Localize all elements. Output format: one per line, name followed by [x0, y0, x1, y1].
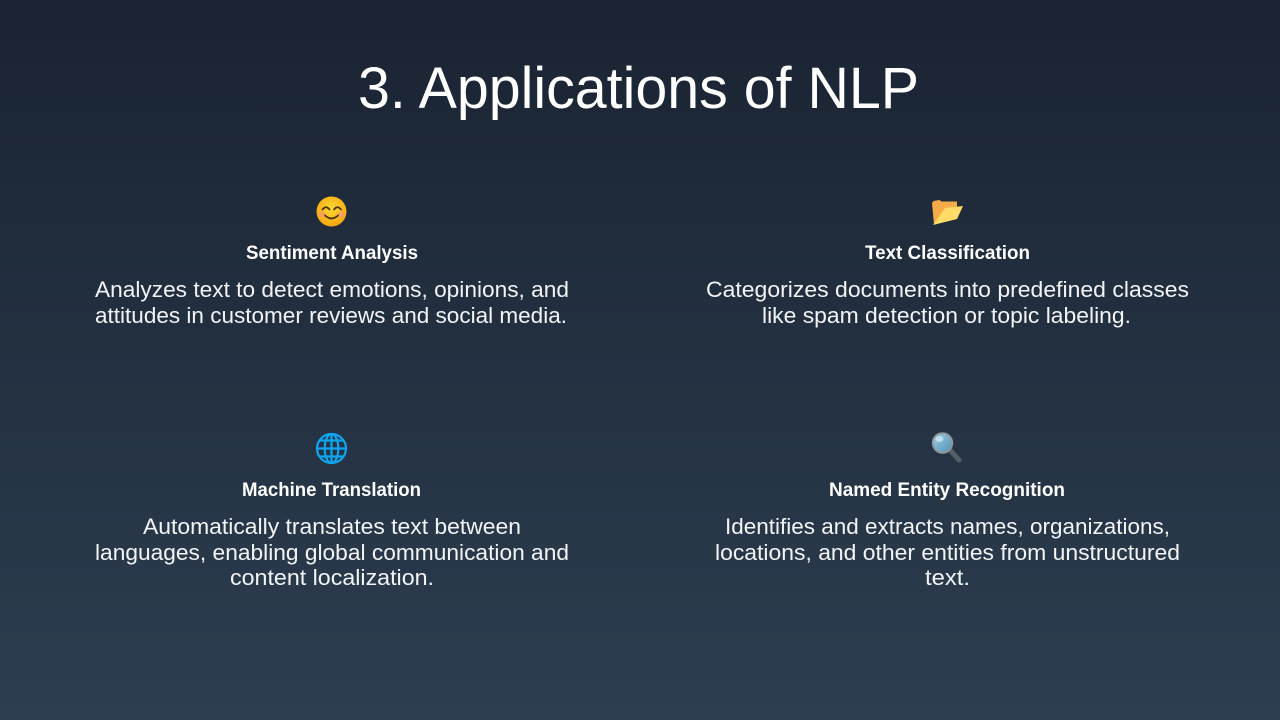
description: content localization. — [230, 565, 434, 590]
description — [95, 277, 569, 328]
description: Identifies and extracts names, organizations, — [725, 514, 1170, 539]
heading: Sentiment Analysis — [246, 242, 418, 264]
description — [706, 277, 1189, 328]
description: Automatically translates text between — [143, 514, 521, 539]
icon: open folder — [932, 200, 963, 225]
description: Categorizes documents into predefined classes — [706, 277, 1189, 302]
description — [715, 514, 1180, 590]
panel: text classification — [706, 200, 1189, 328]
icon: magnifying glass — [933, 433, 959, 460]
panel: machine translation — [95, 434, 569, 590]
heading: Machine Translation — [242, 479, 421, 501]
description: text. — [925, 565, 970, 590]
description: Analyzes text to detect emotions, opinions, and — [95, 277, 569, 302]
panel: sentiment analysis — [95, 196, 569, 328]
icon: smiling face — [316, 196, 346, 226]
description — [95, 514, 569, 590]
title: 3. Applications of NLP — [358, 56, 919, 121]
description: attitudes in customer reviews and social media. — [95, 303, 567, 328]
description: languages, enabling global communication and — [95, 540, 569, 565]
heading: Text Classification — [865, 242, 1030, 264]
icon: globe — [317, 434, 346, 463]
panel: named entity recognition — [715, 433, 1180, 590]
heading: Named Entity Recognition — [829, 479, 1065, 501]
description: locations, and other entities from unstructured — [715, 540, 1180, 565]
description: like spam detection or topic labeling. — [762, 303, 1131, 328]
